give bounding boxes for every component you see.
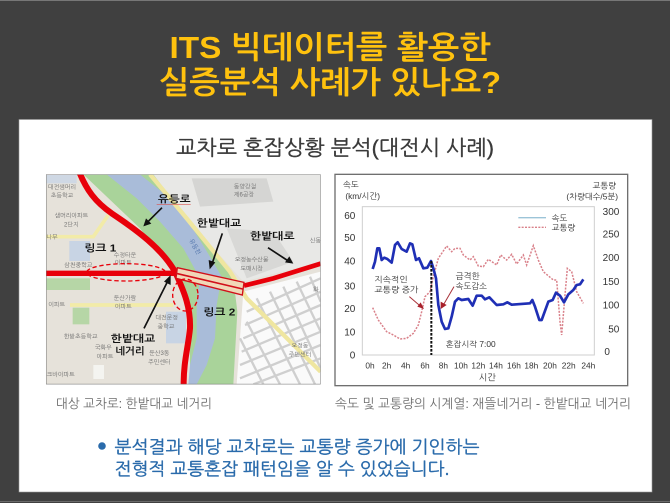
map place labels: 주민센터 [148,359,171,366]
map place labels: 크바아파트 [47,371,75,378]
title: 실증분석 사례가 있나요? [159,65,501,100]
map place labels: 도매시장 [240,265,263,272]
annotation: sharp speed drop: 급격한 [456,271,480,281]
caption: time series: 속도 및 교통량의 시계열: 재뜰네거리 - 한밭대교 네거리 [335,396,631,411]
heading: intersection congestion analysis: 교차로 혼잡상황 분석(대전시 사례) [176,137,494,160]
map callout labels and arrows: 한밭대교 [197,218,242,230]
time axis labels: 8h [439,360,448,370]
time axis labels: 2h [382,360,392,370]
conclusion bullet text: 분석결과 해당 교차로는 교통량 증가에 기인하는 [114,437,480,457]
time axis labels: 10h [454,360,468,370]
map place labels: 수정타운 [114,252,137,259]
highlighted bridge link [176,268,244,295]
map place labels: 삼천중학교 [64,262,93,269]
left axis labels: 속도 [343,180,359,190]
panel: map of Hanbat bridge intersection [46,172,321,386]
map callout labels and arrows: 링크 2 [203,307,236,319]
map place labels: 신동 [310,237,321,244]
map place labels: 아파트 [97,353,114,360]
right axis labels: 150 [603,277,620,288]
map place labels: 제6공장 [234,192,254,199]
map place labels: 화 [313,287,319,294]
annotation: sustained traffic increase: 교통량 증가 [374,284,419,294]
annotation: congestion start time: 혼잡시작 7:00 [446,340,496,349]
annotation: sustained traffic increase: 지속적인 [374,274,408,284]
time axis labels: 12h [471,360,486,370]
right axis labels: 100 [603,301,620,312]
right axis labels: 200 [603,253,620,264]
map place labels: 오정동 [292,343,309,350]
right axis labels: 250 [603,229,620,240]
left axis labels: 30 [344,281,356,292]
map place labels: 주민센터 [289,351,311,358]
left axis labels: 20 [344,304,356,315]
map place labels: 이파트 [48,301,65,308]
left axis labels: 40 [344,256,356,267]
time axis labels [365,360,596,382]
time axis labels: 14h [489,360,503,370]
title [159,30,501,100]
map place labels: 유등천 [187,238,202,256]
map place labels: 샘머리아파트 [54,212,89,219]
map callout labels and arrows: 링크 1 [84,243,117,255]
left axis labels: 60 [344,211,356,222]
right axis labels: (차량대수/5분) [566,192,618,202]
speed solid line [373,242,583,329]
map place labels: 둔산3동 [149,350,170,357]
time axis labels: 18h [524,360,539,370]
time axis labels: 22h [562,360,576,370]
chart legend: 속도 [552,213,567,223]
title: ITS 빅데이터를 활용한 [170,30,490,65]
annotation: sustained traffic increase [374,274,424,309]
map place labels: 둔산가람 [114,295,137,302]
map place labels: 나무 [46,234,58,241]
map place labels: 한밭초등학교 [64,333,98,340]
annotation: sharp speed drop [441,271,487,309]
left axis labels: (km/시간) [345,191,380,201]
map place labels: 아파트 [115,303,132,310]
time axis labels: 6h [420,360,430,370]
time axis labels: 4h [401,360,411,370]
dashed link markers [87,264,198,311]
map place labels: 오정농수산물 [235,257,269,264]
right axis labels: 교통량 [592,180,616,190]
time axis labels: 24h [581,360,596,370]
map callout labels and arrows: 네거리 [115,346,145,358]
map place labels: 중학교 [158,323,175,330]
left axis labels: 50 [344,233,356,244]
traffic volume dotted line [373,246,583,339]
map place labels: 대전샘머리 [48,184,76,191]
conclusion bullet text: 전형적 교통혼잡 패턴임을 알 수 있었습니다. [114,459,450,479]
map callout labels and arrows: 한밭대로 [250,230,295,242]
map place labels: 아파트 [115,259,132,266]
map place labels: 국화우 [95,344,112,351]
left axis labels [343,180,380,362]
right axis labels [566,180,620,358]
map place labels: 동양강철 [234,183,256,190]
plot frame [362,207,594,355]
congestion start marker [428,261,434,355]
map callout labels and arrows: 한밭대교 [111,333,156,345]
right axis labels: 300 [603,207,620,218]
right axis labels: 0 [604,347,610,358]
chart legend: 교통량 [552,223,575,233]
left axis labels: 0 [350,351,356,362]
time axis labels: 0h [365,360,375,370]
map place labels: 대전문정 [155,315,178,322]
red road network [46,172,321,386]
caption: target intersection: 대상 교차로: 한밭대교 네거리 [56,396,212,411]
time axis labels: 16h [507,360,521,370]
map callout labels and arrows [84,193,295,358]
time axis labels: 20h [543,360,557,370]
right axis labels: 50 [608,324,620,335]
left axis labels: 10 [344,328,356,339]
map place labels [46,183,321,378]
conclusion bullet text [98,437,479,479]
map place labels: 2단지 [64,221,79,228]
map callout labels and arrows: 유등로 [158,193,191,205]
time axis labels: 시간 [479,372,496,382]
map place labels: 초등학교 [51,192,74,199]
chart: speed and traffic volume time series [335,174,628,386]
panel: white content card [19,120,652,492]
chart legend [518,213,575,233]
annotation: sharp speed drop: 속도감소 [456,281,487,291]
